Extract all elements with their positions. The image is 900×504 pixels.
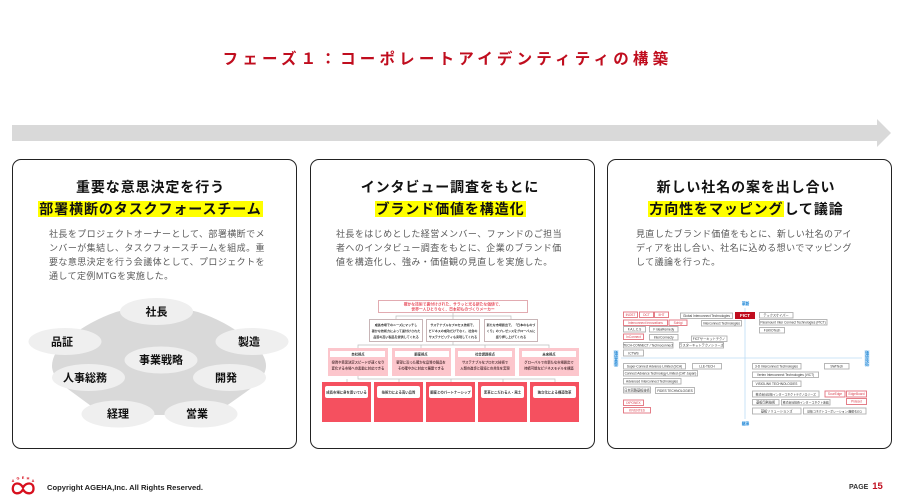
axis labels: 価: [614, 350, 618, 355]
node: quality: 品証: [51, 336, 73, 348]
text block: task force description: ンバーが集結し、タスクフォースチームを組成。重: [49, 243, 265, 253]
value statement text: くり」のプレゼンスをグローバルに: [487, 328, 535, 333]
icon: AGEHA logo: E: [22, 476, 25, 480]
top statement: 世界一人ひとりなく、日本初ものづくりメーカー: [411, 306, 495, 312]
highlighted candidate: FICT: FICT: [740, 313, 750, 318]
red candidate names: Interconnect Innovations: [628, 321, 663, 325]
red strengths panels: [322, 382, 579, 422]
gray candidate names: 日本回路基板技術: [624, 388, 651, 392]
pink panel text: その確やかに対応で展開できる: [398, 366, 444, 370]
red panel label text: 技術力による高い品質: [382, 390, 416, 394]
node: president: 社長: [146, 304, 168, 318]
gray candidate names: FICTサーキットテクノ: [693, 336, 725, 341]
node: sales: [164, 400, 238, 428]
gray candidate names: TECH-CONNECT / Technoconnect: [623, 344, 673, 348]
pink panel text: 変化する市場への素動に対応できる: [332, 366, 384, 370]
red candidate names: [626, 313, 865, 412]
node: development: [193, 364, 266, 391]
axis labels: 継承: [742, 421, 749, 426]
text block: task force description: 社長をプロジェクトオーナーとして、部署横断でメ: [49, 228, 265, 238]
icon: AGEHA logo: [12, 476, 35, 494]
heading: interviews: [361, 179, 539, 217]
text block: interviews description: 値を構造化し、強み・価値観の見直しを実施した。: [336, 257, 553, 267]
node: HR and general affairs: [52, 364, 125, 391]
red candidate names: IIHT: [658, 313, 665, 317]
node: manufacturing: [216, 328, 288, 355]
gray candidate names: Interconnect Technologies: [703, 322, 740, 326]
gray candidate names: 基板印刷技術: [756, 400, 776, 404]
axis labels: 盤: [614, 362, 618, 367]
pink panel headers: [330, 351, 576, 357]
axis labels: 基: [614, 358, 618, 363]
top statement: 確かな技術で裏付けされた、サラッと光る新たな価値で、: [404, 302, 502, 306]
gray candidate names: InterConnecty: [654, 336, 674, 340]
heading: interviews: インタビュー調査をもとに: [361, 179, 539, 195]
pink panel text: グローバルでの新たな市場創出で: [524, 360, 574, 364]
pink panel text: 要望に沿った確かな品質の製品を: [396, 360, 446, 364]
gray candidate names: Paramount Inter Connect Technologies (PICT): [760, 320, 826, 324]
icon: AGEHA logo: A: [12, 479, 15, 483]
pink panel text: [332, 352, 574, 370]
axis labels: 技: [865, 358, 869, 363]
node: president: [120, 298, 193, 325]
chart: company name positioning map: [614, 301, 870, 426]
node: accounting: 経理: [107, 408, 129, 420]
pink panel text: 社会課題視点: [475, 352, 496, 356]
pink panel text: サステナブルなプロセス技術で: [462, 360, 509, 364]
text block: mapping description: ディアを出し合い、社名に込める想いでマッピング: [636, 243, 852, 253]
node: HR and general affairs: 人事総務: [63, 370, 107, 384]
text block: interviews description: [336, 228, 562, 267]
gray candidate names: ラスターキットテクノシリーズ: [679, 342, 724, 348]
gray candidate names: 株式会社技術インターコネクト連絡: [783, 400, 829, 404]
axis labels: 革新: [742, 301, 749, 306]
text block: interviews description: 者へのインタビュー調査をもとに、企業のブランド価: [336, 243, 562, 253]
heading: mapping: 方向性をマッピングして議論: [649, 201, 844, 217]
text block: task force description: 要な意思決定を行う会議体として、プロジェクトを: [49, 257, 265, 267]
red candidate names: Pideset: [851, 400, 862, 404]
text block: mapping description: [636, 228, 852, 267]
panel: mapping: [607, 159, 892, 449]
footer: copyright: Copyright AGEHA,Inc. All Rights Reserved.: [47, 483, 203, 492]
red candidate names: EdgeBoard: [849, 392, 865, 396]
red candidates: [624, 312, 866, 413]
pink panel text: 未来視点: [542, 352, 556, 356]
icon: AGEHA logo: A: [32, 479, 35, 483]
value statement text: 盛り押し上げてくれる: [496, 334, 526, 339]
gray candidate names: VISIOLINK TECHNOLOGIES: [756, 382, 797, 386]
node: sales: 営業: [186, 406, 208, 420]
gray candidate names: Advanced Interconnect Technologies: [626, 380, 678, 384]
axis labels: 価: [865, 350, 869, 355]
value statement text: 確かな技術力によって裏付けされた: [372, 328, 420, 333]
red panel label text: [326, 390, 572, 394]
red panel label text: 変革にこだわる人・風土: [484, 390, 522, 394]
node: quality: [28, 328, 102, 355]
value statement text: 品質の高い製品を提供してくれる: [373, 334, 419, 339]
footer: page number: PAGE 15: [849, 481, 883, 492]
heading: task force: 重要な意思決定を行う: [76, 179, 225, 195]
top statement: [378, 300, 528, 312]
heading: task force: 部署横断のタスクフォースチーム: [39, 201, 262, 217]
node: manufacturing: 製造: [238, 334, 260, 348]
icon: AGEHA logo: G: [17, 476, 20, 480]
gray candidate names: [623, 312, 862, 414]
text block: mapping description: 見直したブランド価値をもとに、新しい社名のアイ: [636, 228, 852, 238]
gray candidates: [624, 312, 866, 414]
gray candidate names: 基板コネクトコーポレーション(機密化EC): [807, 408, 862, 414]
pink panel text: 投資や意思決定スピードが速くなり: [332, 360, 384, 364]
value statement text: サステナビリティも実現してくれる: [429, 334, 477, 339]
diagram: brand value structure: [322, 300, 579, 422]
gray candidate names: ICTWS: [628, 352, 639, 356]
pink value panels: [328, 348, 579, 376]
red panel label text: 独立化による構造改革: [538, 390, 572, 394]
diagram: departments around business strategy: [28, 298, 288, 428]
gray candidate names: Global Interconnect Technologies: [683, 314, 730, 318]
axes: [621, 308, 862, 419]
gray candidate names: 株式会社基板インターコネクトテクノロジーズ: [756, 392, 816, 396]
red candidate names: SourEdge: [828, 392, 842, 396]
pink panel text: 人類の進歩と環境との共生を実現: [460, 366, 510, 370]
red panel label text: 成長市場に身を置いている: [326, 390, 367, 394]
highlighted candidate: FICT: [735, 312, 755, 319]
red candidate names: Sohigi: [674, 321, 683, 325]
red panel labels: [325, 386, 576, 398]
heading: task force: [38, 179, 263, 217]
icon: AGEHA logo: H: [27, 476, 30, 480]
gray candidate names: Super-Connect Advance Limited (SCA): [627, 364, 682, 368]
red candidate names: DCT: [643, 313, 650, 317]
node: accounting: [82, 400, 154, 428]
gray candidate names: Vertex Interconnect Technologies (VICT): [757, 373, 814, 377]
red candidate names: KIVENTES: [629, 408, 645, 412]
axis labels: 値: [614, 354, 618, 359]
value statement text: 新たな市場創出で、「日本のものづ: [487, 322, 535, 327]
arrow: process direction: [12, 119, 891, 147]
axis labels: 術: [865, 362, 869, 367]
gray candidate names: Connect Advance Technology Limited (CAT Japan): [625, 372, 696, 376]
panel: task force: [12, 159, 297, 449]
red panel label text: 顧客とのパートナーシップ: [430, 390, 471, 394]
text block: interviews description: 社長をはじめとした経営メンバー、ファンドのご担当: [336, 228, 562, 238]
axis labels: [614, 301, 870, 426]
text block: task force description: 通して定例MTGを実施した。: [49, 271, 174, 281]
heading: interviews: ブランド価値を構造化: [376, 201, 524, 217]
gray candidate names: 3-D Interconnect Technologies: [755, 364, 798, 368]
gray candidate names: テックスケイパー: [763, 312, 789, 318]
text block: mapping description: して議論を行った。: [636, 257, 721, 267]
red candidate names: IXPONEX: [626, 401, 641, 405]
title: フェーズ１：コーポレートアイデンティティの構築: [223, 47, 672, 69]
panel: interviews: [310, 159, 594, 449]
value statements: [370, 320, 538, 342]
heading: mapping: [648, 179, 844, 217]
value statement text: [372, 322, 535, 339]
gray candidate names: SWITech: [830, 364, 843, 368]
pink panel text: 持続可能なビジネスモデルを構築: [524, 366, 574, 370]
heading: mapping: 新しい社名の案を出し合い: [657, 179, 835, 195]
gray candidate names: F.A.L.C.S: [628, 328, 641, 332]
text block: task force description: [49, 228, 265, 281]
node: development: 開発: [215, 370, 237, 384]
node: business strategy: [124, 346, 198, 374]
gray candidate names: FUKIOTech: [764, 328, 780, 332]
value statement text: サステナブルなプロセス技術で、: [430, 322, 476, 327]
axis labels: 値: [865, 354, 869, 359]
red candidate names: INOST: [626, 313, 635, 317]
gray candidate names: 基板ソリューションズ: [761, 408, 793, 414]
value statement text: ビジネスの成功だけでなく、社会の: [429, 328, 477, 333]
gray candidate names: LLE-TECH: [699, 364, 715, 368]
value statement text: 成長市場でのニーズにマッチし: [375, 322, 417, 327]
red candidate names: InConnect: [626, 335, 641, 339]
node: business strategy: 事業戦略: [139, 352, 183, 366]
gray candidate names: FIDES TECHNOLOGIES: [657, 389, 693, 393]
gray candidate names: F ideaRemedy: [653, 328, 674, 332]
pink panel text: 自社視点: [351, 352, 365, 356]
pink panel text: 顧客視点: [414, 352, 428, 356]
